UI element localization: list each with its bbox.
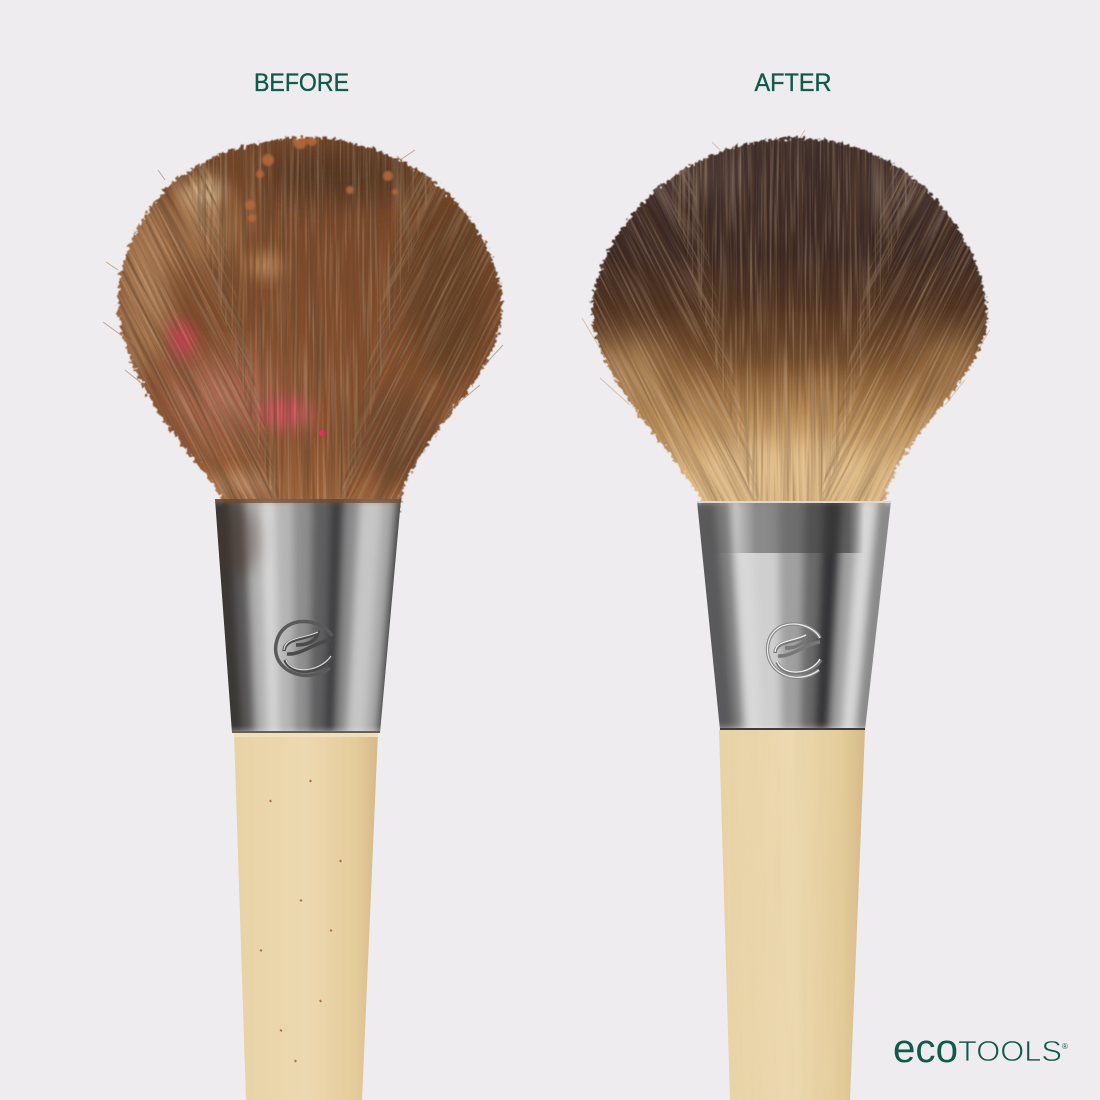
brush: after	[582, 130, 990, 1100]
handle: after	[719, 730, 865, 1100]
logo: ecotools: eco	[893, 1027, 958, 1071]
heading: before: BEFORE	[254, 69, 349, 97]
heading: after: AFTER	[754, 69, 832, 97]
radial streaks	[592, 136, 984, 504]
flyaway hairs	[103, 150, 503, 410]
radial streaks	[117, 144, 501, 512]
emblem: after	[767, 624, 821, 677]
brush: before	[0, 73, 851, 1100]
ferrule: before	[215, 499, 401, 733]
ferrule: after	[697, 501, 891, 730]
logo: ecotools: ®	[1062, 1042, 1068, 1051]
flyaway hairs	[582, 130, 990, 405]
powder specks	[245, 135, 398, 222]
bristles: after	[582, 130, 990, 507]
logo: ecotools: TOOLS	[958, 1036, 1062, 1068]
handle: before	[234, 732, 378, 1100]
logo: ecotools	[893, 1027, 1068, 1071]
bristles: before	[102, 134, 505, 513]
emblem: before	[276, 622, 332, 675]
